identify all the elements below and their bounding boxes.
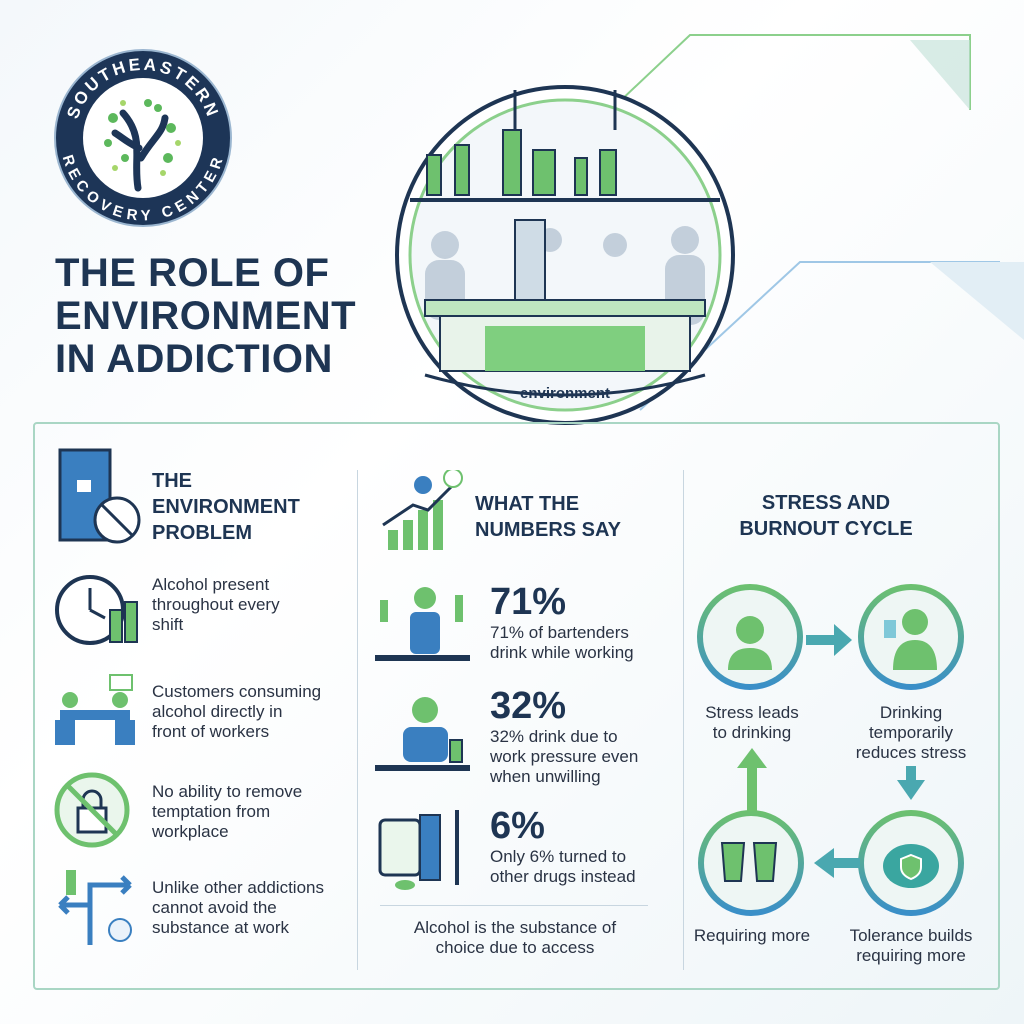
stat 32%: 32% drink due to	[490, 727, 618, 746]
footer note	[414, 918, 616, 957]
stat 71%: 71%	[490, 581, 566, 623]
logo	[54, 49, 232, 227]
icon: chart	[382, 470, 463, 550]
panel: the environment problem: Alcohol present	[152, 575, 269, 594]
cycle diagram: Requiring more	[694, 926, 810, 945]
icon: door with no-alcohol	[58, 448, 140, 544]
stat 6%: other drugs instead	[490, 867, 636, 886]
icon: brain	[883, 844, 939, 888]
heading: THE	[152, 470, 192, 492]
stat 6%	[378, 805, 636, 890]
stat 71%	[375, 581, 634, 662]
item: arrows	[58, 870, 132, 945]
cycle diagram: Tolerance builds	[850, 926, 972, 945]
stat 6%: Only 6% turned to	[490, 847, 626, 866]
hero illustration: bar environment	[395, 85, 735, 425]
panel: the environment problem: No ability to remove	[152, 782, 302, 801]
heading	[152, 470, 300, 544]
icon: stressed person	[728, 616, 772, 670]
stat 32%	[375, 685, 638, 786]
item: customers	[55, 674, 135, 745]
cycle labels: to drinking	[713, 723, 791, 742]
hero illustration: bar environment: environment	[520, 385, 610, 402]
item: clock	[55, 575, 138, 645]
logo: SOUTHEASTERN	[68, 58, 218, 118]
icon: drinking person	[884, 609, 937, 670]
cycle labels	[705, 703, 799, 742]
footer note: choice due to access	[436, 938, 594, 957]
panel: the environment problem	[54, 448, 324, 945]
icon: two glasses	[722, 843, 776, 881]
item: lock	[54, 772, 130, 848]
cycle diagram: requiring more	[856, 946, 966, 965]
panel: what the numbers say: when unwilling	[490, 767, 601, 786]
panel: the environment problem: temptation from	[152, 802, 270, 821]
logo: RECOVERY CENTER	[62, 154, 222, 220]
panel: the environment problem: alcohol directly in	[152, 702, 282, 721]
panel: the environment problem: shift	[152, 615, 183, 634]
title: ENVIRONMENT	[55, 294, 356, 338]
heading: WHAT THE	[475, 493, 579, 515]
cycle diagram: Drinking	[880, 703, 942, 722]
arrows	[806, 624, 925, 878]
footer note: Alcohol is the substance of	[414, 918, 616, 937]
heading: NUMBERS SAY	[475, 519, 621, 541]
heading: stress and burnout cycle	[739, 492, 913, 540]
title	[55, 251, 356, 381]
cycle labels: Stress leads	[705, 703, 799, 722]
stat 71%: 71% of bartenders	[490, 623, 629, 642]
heading: PROBLEM	[152, 522, 252, 544]
main panel frame	[33, 422, 1000, 990]
panel: the environment problem: Unlike other addictions	[152, 878, 324, 897]
stat 6%: 6%	[490, 805, 545, 847]
heading: stress and burnout cycle: BURNOUT CYCLE	[739, 518, 913, 540]
heading: ENVIRONMENT	[152, 496, 300, 518]
panel: the environment problem: workplace	[152, 822, 229, 841]
title: IN ADDICTION	[55, 337, 333, 381]
panel: the environment problem: substance at work	[152, 918, 289, 937]
panel: what the numbers say	[375, 470, 648, 957]
heading	[475, 493, 621, 541]
cycle diagram	[694, 584, 972, 965]
panel: the environment problem: cannot avoid the	[152, 898, 277, 917]
stat 32%: 32%	[490, 685, 566, 727]
heading: stress and burnout cycle: STRESS AND	[762, 492, 890, 514]
cycle diagram: temporarily	[869, 723, 953, 742]
title: THE ROLE OF	[55, 251, 329, 295]
panel: the environment problem: Customers consuming	[152, 682, 321, 701]
cycle diagram: reduces stress	[856, 743, 966, 762]
panel: the environment problem: throughout every	[152, 595, 280, 614]
stat 32%: work pressure even	[490, 747, 638, 766]
stat 71%: drink while working	[490, 643, 634, 662]
panel: the environment problem: front of workers	[152, 722, 269, 741]
